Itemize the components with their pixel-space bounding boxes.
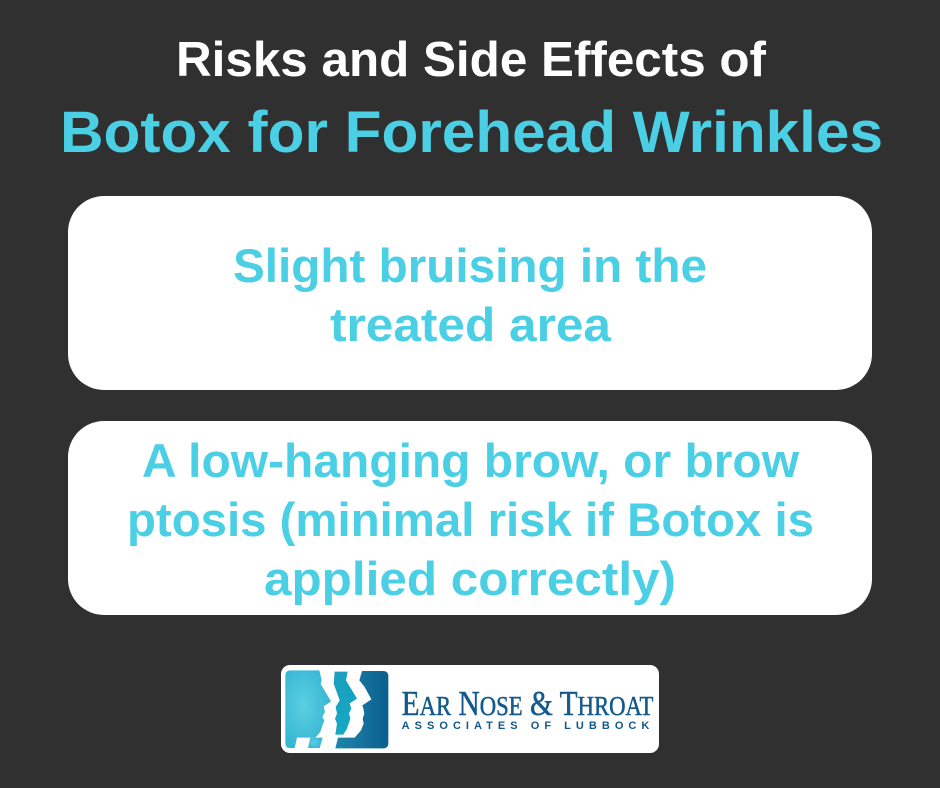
panel: low-hanging brow [68, 421, 872, 615]
icon: face profiles [285, 670, 388, 748]
panel text: slight bruising: treated area [330, 298, 612, 351]
logo [281, 665, 659, 753]
logo tagline: ASSOCIATES OF LUBBOCK [402, 720, 649, 732]
title line: botox for forehead wrinkles: Botox for Forehead Wrinkles [60, 100, 883, 165]
panel: slight bruising [68, 196, 872, 390]
panel text: low-hanging brow: A low-hanging brow, or brow [142, 434, 799, 487]
title line: risks and side effects: Risks and Side Effects of [176, 33, 767, 87]
logo wordmark: EAR NOSE & THROAT [402, 684, 654, 723]
logo plate [281, 665, 659, 753]
panel text: slight bruising: Slight bruising in the [233, 239, 707, 292]
panel text: slight bruising [233, 239, 707, 351]
panel text: low-hanging brow [127, 434, 814, 605]
panel text: low-hanging brow: ptosis (minimal risk if Botox is [127, 493, 814, 546]
title [60, 33, 883, 165]
panel text: low-hanging brow: applied correctly) [264, 552, 676, 605]
